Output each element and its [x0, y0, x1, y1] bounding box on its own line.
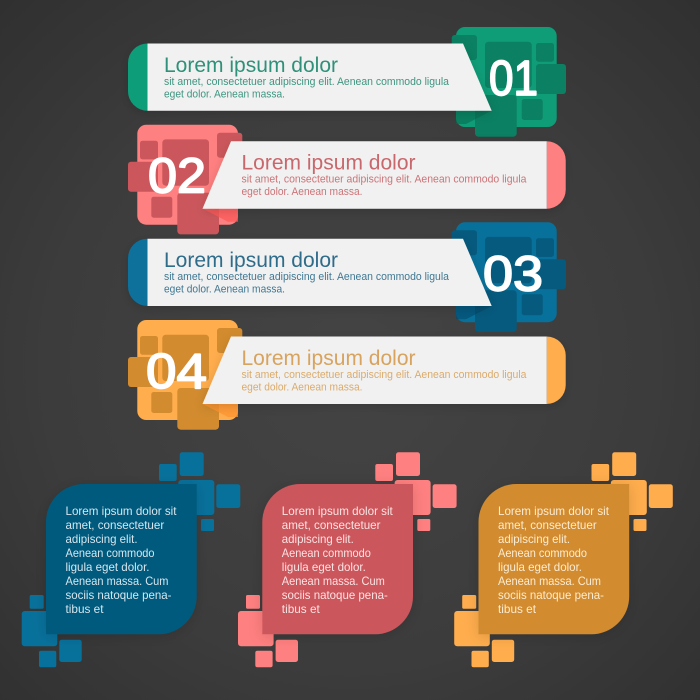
- number 02: 02: [148, 150, 206, 204]
- panel: orange card: [454, 452, 673, 667]
- panel: red card: [238, 452, 457, 667]
- card text: amet, consectetuer: [66, 518, 164, 532]
- number 01: 01: [489, 52, 538, 106]
- card text: Aenean commodo: [498, 546, 587, 560]
- number 03: 03: [483, 248, 543, 302]
- description 01: sit amet, consectetuer adipiscing elit. Aenean commodo ligula: [164, 76, 449, 88]
- banner row 02: [128, 125, 566, 234]
- card text: Aenean commodo: [282, 546, 371, 560]
- card text: adipiscing elit.: [282, 532, 354, 546]
- ribbon 04: [202, 336, 566, 404]
- banner row 03: [128, 222, 566, 332]
- description 04: eget dolor. Aenean massa.: [242, 381, 362, 393]
- card text: Lorem ipsum dolor sit: [66, 504, 177, 518]
- banner row 01: [128, 27, 566, 137]
- card shape: [46, 484, 197, 634]
- card text: Lorem ipsum dolor sit: [282, 504, 393, 518]
- card text: sociis natoque pena-: [282, 588, 388, 602]
- card text: Lorem ipsum dolor sit: [498, 504, 610, 518]
- card text: tibus et: [282, 602, 320, 616]
- banner row 04: [128, 320, 566, 430]
- card text: Aenean massa. Cum: [66, 574, 168, 588]
- description 04: sit amet, consectetuer adipiscing elit. Aenean commodo ligula: [242, 369, 526, 381]
- icon: blue squares: [22, 452, 240, 667]
- card text: amet, consectetuer: [282, 518, 380, 532]
- icon: tile 03: [452, 222, 566, 332]
- card text: adipiscing elit.: [66, 532, 138, 546]
- card shape: [478, 484, 629, 634]
- card text: sociis natoque pena-: [498, 588, 604, 602]
- card text: ligula eget dolor.: [282, 560, 366, 574]
- card text: Aenean commodo: [66, 546, 155, 560]
- description 03: eget dolor. Aenean massa.: [164, 284, 285, 296]
- heading 03: Lorem ipsum dolor: [164, 248, 338, 272]
- icon: tile 02: [128, 125, 242, 234]
- card text: ligula eget dolor.: [66, 560, 150, 574]
- card text: ligula eget dolor.: [498, 560, 582, 574]
- heading 04: Lorem ipsum dolor: [242, 346, 416, 370]
- description 02: sit amet, consectetuer adipiscing elit. Aenean commodo ligula: [242, 174, 526, 186]
- icon: orange squares: [454, 452, 673, 667]
- ribbon 01: [128, 44, 492, 111]
- card text: tibus et: [498, 602, 537, 616]
- icon: tile 04: [128, 320, 242, 430]
- card text: adipiscing elit.: [498, 532, 570, 546]
- heading 01: Lorem ipsum dolor: [164, 53, 338, 77]
- card text: Aenean massa. Cum: [498, 574, 601, 588]
- number 04: 04: [146, 345, 207, 399]
- icon: tile 01: [452, 27, 566, 137]
- icon: pink squares: [238, 452, 457, 667]
- ribbon 02: [202, 141, 566, 209]
- description 01: eget dolor. Aenean massa.: [164, 88, 285, 100]
- description 02: eget dolor. Aenean massa.: [242, 186, 362, 198]
- card shape: [262, 484, 413, 634]
- ribbon 03: [128, 239, 492, 306]
- heading 02: Lorem ipsum dolor: [242, 151, 416, 175]
- panel: blue card: [22, 452, 240, 667]
- card text: amet, consectetuer: [498, 518, 597, 532]
- card text: Aenean massa. Cum: [282, 574, 385, 588]
- card text: sociis natoque pena-: [66, 588, 172, 602]
- card text: tibus et: [66, 602, 104, 616]
- description 03: sit amet, consectetuer adipiscing elit. Aenean commodo ligula: [164, 271, 449, 283]
